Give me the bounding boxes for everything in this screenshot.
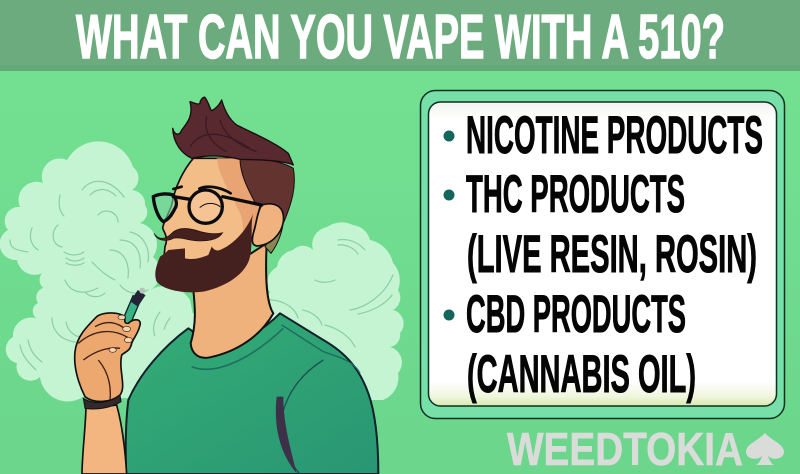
- vapor cloud: left: [0, 141, 210, 401]
- vapor cloud: right: [150, 222, 404, 400]
- ear: [252, 204, 283, 246]
- item: THC products: [444, 165, 757, 284]
- top hair: [173, 97, 293, 165]
- neck: [191, 243, 273, 358]
- t-shirt: [126, 313, 378, 474]
- arm and hand: [75, 288, 145, 474]
- arm: [82, 405, 127, 474]
- body: [126, 243, 378, 474]
- mustache: [154, 229, 223, 241]
- face: [163, 158, 260, 263]
- beard: [155, 213, 253, 292]
- illustration: man exhaling vapor: [75, 97, 378, 474]
- side hair: [240, 158, 294, 222]
- header band: [0, 0, 800, 72]
- head: [153, 97, 294, 292]
- vape pen: [127, 288, 145, 322]
- back of head: [265, 218, 283, 253]
- hand: [75, 313, 140, 401]
- item: CBD products: [444, 285, 696, 404]
- list panel: [420, 90, 784, 418]
- logo: WeedTokia: WEEDTOKIA: [507, 423, 743, 474]
- glasses: [153, 187, 262, 223]
- icon: spade: [746, 433, 784, 465]
- wristband: [83, 395, 121, 409]
